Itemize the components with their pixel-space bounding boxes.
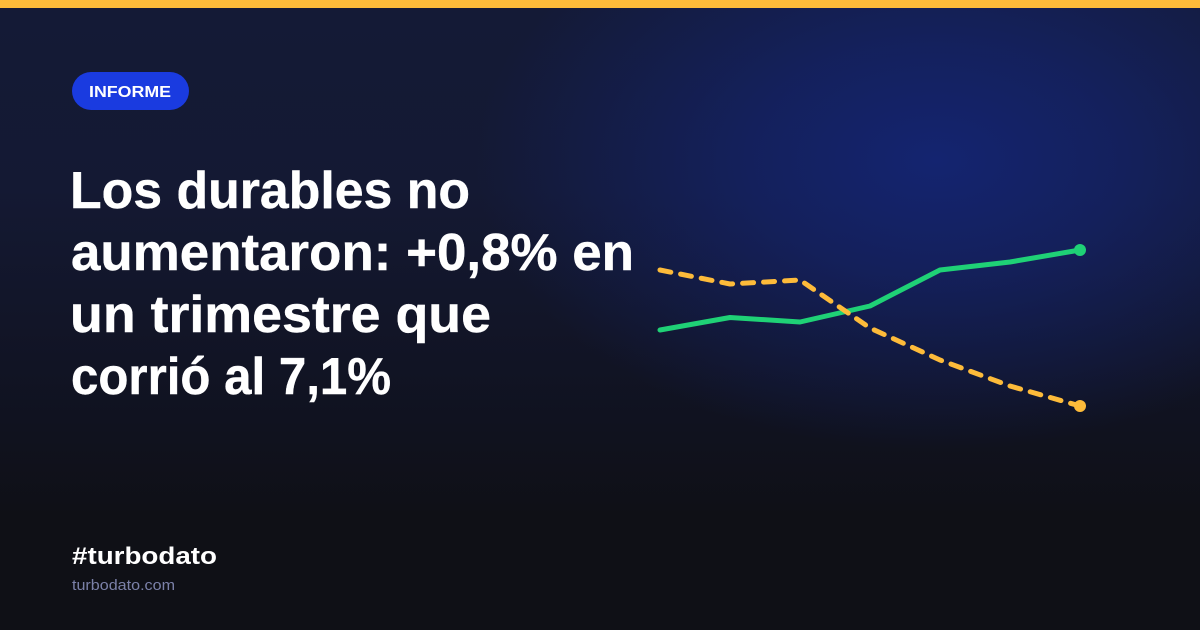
top accent bar [0,0,1200,8]
site url: turbodato.com [72,578,175,594]
title: corrió al 7,1% [71,348,391,406]
line chart [660,244,1086,412]
brand hashtag: #turbodato [72,543,217,570]
yellow dashed series line [660,270,1086,412]
title: un trimestre que [70,286,491,344]
title: Los durables no [70,162,470,220]
title [70,162,634,406]
badge: INFORME: INFORME [89,84,171,101]
title: aumentaron: +0,8% en [71,224,634,282]
green series line [660,244,1086,330]
badge: INFORME [72,72,189,110]
